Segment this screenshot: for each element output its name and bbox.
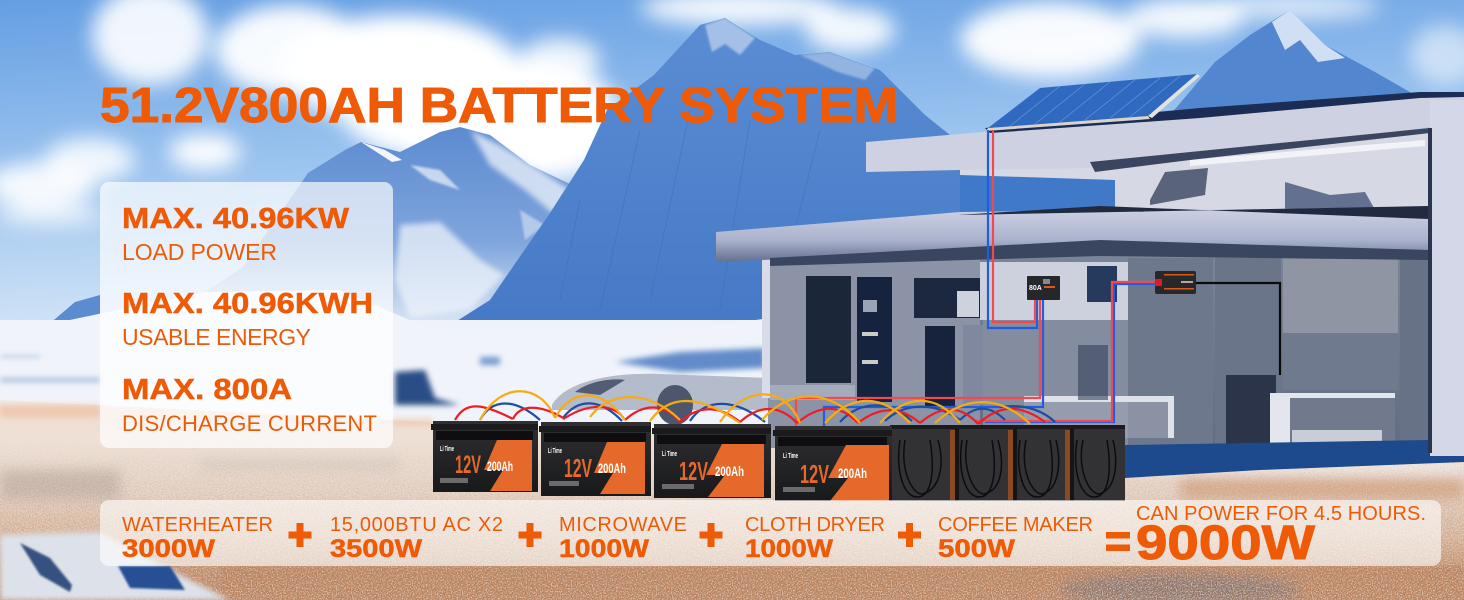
house: white pillar	[762, 258, 770, 398]
house: doors and windows	[770, 266, 1117, 406]
item: cloth dryer	[745, 514, 885, 563]
spec: load power: LOAD POWER	[122, 239, 277, 265]
background: parked car	[552, 374, 770, 425]
house: ground floor wall	[770, 255, 1435, 445]
house: top roof slab	[866, 92, 1464, 172]
panel: appliance power sum	[100, 500, 1441, 570]
battery row	[431, 421, 1125, 501]
house: lower wall	[983, 320, 1128, 445]
background: far right mountain	[1170, 10, 1415, 115]
house: upper room details	[1150, 140, 1425, 215]
background: left small peak	[48, 295, 100, 325]
battery 1	[431, 421, 538, 492]
background: sky	[0, 0, 1464, 345]
spec: load power: MAX. 40.96KW	[122, 203, 350, 235]
total runtime note: CAN POWER FOR 4.5 HOURS.	[1136, 503, 1426, 525]
item: water heater	[122, 514, 273, 563]
charge controller	[1027, 276, 1060, 300]
item: coffee maker: 500W	[938, 535, 1015, 563]
house: right column	[1430, 100, 1464, 456]
item: coffee maker: COFFEE MAKER	[938, 514, 1093, 536]
item: air conditioner: 3500W	[330, 535, 422, 563]
background: main mountain	[438, 18, 1115, 333]
inverter	[1155, 271, 1196, 294]
plus sign	[518, 523, 542, 547]
plus sign	[288, 523, 312, 547]
item: microwave: MICROWAVE	[559, 514, 687, 536]
spec: usable energy	[122, 288, 373, 350]
item: cloth dryer: CLOTH DRYER	[745, 514, 885, 536]
battery 1: 200Ah	[487, 458, 513, 474]
battery 4: Li Time	[783, 453, 798, 460]
item: microwave: 1000W	[559, 535, 649, 563]
house: middle slab	[716, 207, 1428, 262]
house: blue floor	[1125, 440, 1464, 478]
battery 4: 12V	[800, 459, 829, 489]
panel: key specs	[100, 182, 393, 448]
battery 3: Li Time	[662, 451, 677, 458]
spec: load power	[122, 203, 350, 265]
equals sign	[1106, 532, 1130, 551]
battery 2: 12V	[564, 453, 592, 483]
plus sign	[700, 523, 722, 547]
house: grey panels	[1128, 258, 1430, 448]
spec: dis/charge current	[122, 374, 377, 436]
spec: dis/charge current: DIS/CHARGE CURRENT	[122, 411, 377, 436]
item: coffee maker	[938, 514, 1093, 563]
charge controller: 80A	[1029, 285, 1042, 292]
house: white upper wall	[980, 262, 1128, 320]
total power: 9000W	[1136, 517, 1316, 570]
background: snow and sand ground	[0, 290, 1464, 600]
item: microwave	[559, 514, 687, 563]
battery 3: 200Ah	[715, 463, 744, 479]
spec: usable energy: USABLE ENERGY	[122, 324, 311, 350]
battery 4	[773, 426, 892, 501]
battery 3: 12V	[679, 456, 708, 486]
house: mountain seen through upper room	[960, 175, 1115, 213]
background: sand foreground with rocks	[0, 430, 1464, 600]
item: water heater: 3000W	[122, 535, 215, 563]
battery 2	[539, 422, 651, 496]
battery 2: Li Time	[548, 448, 562, 455]
battery connection wires	[455, 391, 1055, 424]
background: clouds	[0, 0, 1464, 225]
title: 51.2V800AH BATTERY SYSTEM	[100, 79, 898, 133]
battery 4: 200Ah	[838, 465, 867, 481]
item: cloth dryer: 1000W	[745, 535, 833, 563]
background: middle mountain	[205, 127, 590, 335]
spec: usable energy: MAX. 40.96KWH	[122, 288, 373, 320]
battery 1: 12V	[455, 451, 481, 479]
side view batteries	[890, 425, 1125, 501]
battery 1: Li Time	[440, 446, 454, 453]
house	[716, 74, 1464, 478]
item: water heater: WATERHEATER	[122, 514, 273, 536]
plus sign	[898, 523, 921, 547]
house: upper room	[960, 130, 1430, 225]
house: solar panel	[986, 74, 1200, 131]
battery 2: 200Ah	[598, 460, 626, 476]
house: lower room furniture	[1024, 345, 1395, 456]
house: left gray facade	[768, 258, 980, 448]
solar and load wiring	[796, 130, 1280, 426]
spec: dis/charge current: MAX. 800A	[122, 374, 292, 406]
item: air conditioner: 15,000BTU AC X2	[330, 514, 503, 536]
item: air conditioner	[330, 514, 503, 563]
battery 3	[652, 424, 771, 498]
